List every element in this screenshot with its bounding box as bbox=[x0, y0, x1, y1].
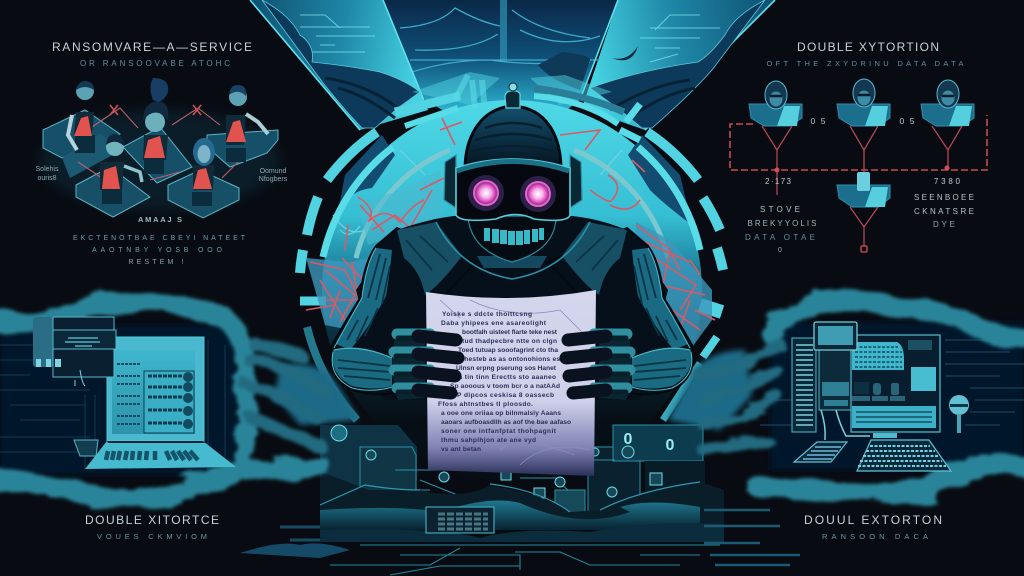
side ear plates bbox=[444, 155, 582, 208]
connector label: 05 bbox=[810, 116, 826, 126]
collar line bbox=[436, 222, 590, 279]
server rack bbox=[792, 338, 816, 432]
tower bbox=[819, 350, 851, 410]
laptop screen bbox=[107, 337, 204, 441]
red dashed bracket bbox=[730, 115, 987, 170]
top knob bbox=[505, 83, 520, 108]
inner arc segments bbox=[323, 75, 700, 257]
left tangle fill bbox=[306, 258, 372, 330]
right stack text: SEENBOEE bbox=[914, 193, 974, 202]
left stack text: DATA OTAE bbox=[745, 233, 815, 242]
note text: bootfalh uisteet flarte teke nest bbox=[462, 329, 558, 336]
note text: aaoars aufboasdllh as aof the bae aafaso bbox=[441, 419, 571, 426]
isometric platform network bbox=[40, 105, 280, 218]
figure 3 bbox=[226, 85, 268, 162]
mouse lamp bbox=[949, 395, 969, 433]
note text: vs ant betan bbox=[441, 446, 481, 453]
subheading: OFT THE ZXYDRINU DATA DATA bbox=[766, 59, 964, 68]
panel digit: 0 bbox=[624, 431, 633, 448]
panel: right desktop scene bbox=[704, 300, 1024, 493]
hacker hands bbox=[392, 332, 632, 400]
body text bbox=[73, 235, 246, 266]
panel: left laptop scene bbox=[0, 302, 325, 497]
left stack text: STOVE bbox=[760, 205, 800, 214]
rock patches between arcs bbox=[333, 72, 692, 234]
left stack text: BREKYYOLIS bbox=[748, 219, 816, 228]
bottom hills and traces bbox=[240, 472, 800, 575]
neck plate bbox=[477, 256, 547, 268]
body arc bbox=[574, 150, 668, 258]
popup window bbox=[33, 317, 116, 386]
dome shading bbox=[470, 123, 556, 152]
right eye bbox=[520, 176, 556, 212]
smoke frame bbox=[704, 300, 1024, 493]
left tangle fill upper bbox=[358, 170, 442, 245]
jaw bbox=[468, 216, 556, 262]
caption: bottom left: DOUBLE XITORTCE bbox=[85, 513, 219, 527]
right tangle fill bbox=[636, 222, 712, 350]
robot hacker figure bbox=[331, 83, 693, 400]
teeth bbox=[484, 228, 544, 245]
node 2 bbox=[837, 79, 890, 172]
main monitor bbox=[851, 335, 940, 438]
small monitor bbox=[814, 322, 857, 350]
caption: bottom right: RANSOON DACA bbox=[822, 532, 928, 541]
circuit panels bbox=[320, 425, 705, 520]
body arc bbox=[356, 150, 450, 258]
figure 1 bbox=[68, 81, 95, 153]
value: 2·173 bbox=[765, 177, 792, 186]
note text: soner one intfanfptat thohpagnit bbox=[441, 428, 557, 435]
top V panorama bbox=[250, 0, 775, 150]
side label right 2: Nfogbers bbox=[259, 176, 288, 183]
note text: Yoiske s ddcte thoittcsng bbox=[442, 311, 532, 318]
note text: S P dipcos ceskisa 8 oassecb bbox=[450, 392, 554, 399]
small label: AMAAJ S bbox=[138, 215, 182, 224]
right stack text: CKNATSRE bbox=[914, 207, 974, 216]
bottom circuit city bbox=[320, 425, 705, 520]
left stack text: 0 bbox=[778, 247, 782, 254]
side label left 2: ouris8 bbox=[37, 175, 57, 182]
disc fill bbox=[322, 100, 702, 480]
note text: Thesteb as as ontonohions es bbox=[460, 356, 560, 363]
caption: bottom right bbox=[804, 513, 942, 541]
right stack text bbox=[914, 193, 974, 229]
outer arc segments bbox=[300, 96, 723, 420]
laptop keyboard bbox=[85, 441, 236, 469]
note text: Daba yhipees ene asareolight bbox=[441, 320, 547, 327]
note text: ta tin tinn Erectts sto aaaneo bbox=[456, 374, 556, 381]
note text: a ooe one oriiaa op bilnmalsly Aaans bbox=[441, 410, 561, 417]
note text: Ffoss ahtnstbes tl ploosdo. bbox=[438, 401, 533, 408]
smoke frame bbox=[0, 302, 325, 497]
figure 5 bbox=[192, 138, 215, 206]
heading: RANSOMVARE—A—SERVICE bbox=[52, 40, 252, 54]
note text: tud thadpecbre ntte on clgn bbox=[462, 338, 557, 345]
connector label: 05 bbox=[900, 116, 915, 126]
note text: Toed tutuap sooofagrint cto tha bbox=[458, 347, 558, 354]
body text: RESTEM ! bbox=[128, 259, 184, 266]
figure 4 bbox=[100, 134, 142, 204]
cup icon bbox=[74, 440, 98, 456]
caption: bottom left bbox=[85, 513, 219, 541]
panel digit: 0 bbox=[666, 437, 675, 454]
ransom note paper bbox=[426, 290, 596, 476]
left eye bbox=[468, 175, 504, 211]
body text: EKCTENOTBAE CBEYI NATEET bbox=[73, 235, 246, 242]
side label right: Oomund bbox=[260, 168, 287, 175]
right stack text: DYE bbox=[933, 220, 955, 229]
caption: bottom left: VOUES CKMVIOM bbox=[97, 532, 207, 541]
value: 7380 bbox=[934, 177, 961, 186]
torso bbox=[356, 215, 668, 400]
node 1 bbox=[749, 81, 802, 195]
circular cyber ring bbox=[300, 72, 723, 480]
side label left: Solehis bbox=[36, 166, 59, 173]
note text bbox=[438, 311, 571, 453]
note text: thmu sahplhjon ate ane vyd bbox=[441, 437, 536, 444]
lower node bbox=[837, 172, 890, 252]
rock mass beside ring bbox=[275, 350, 752, 430]
data terminal bbox=[426, 507, 494, 533]
note text: Ulnsn erpng pserung sos Hanet bbox=[456, 365, 557, 372]
figure 2 bbox=[143, 78, 168, 174]
panel: ransomware-as-a-service bbox=[36, 40, 288, 266]
note text: Sp aooous v toom bcr o a natAAd bbox=[450, 383, 560, 390]
caption: bottom right: DOUUL EXTORTON bbox=[804, 513, 942, 527]
head dome bbox=[465, 106, 561, 170]
main keyboard bbox=[857, 440, 951, 471]
left stack text bbox=[745, 205, 816, 254]
red data veins bbox=[306, 118, 715, 350]
node 3 bbox=[921, 80, 974, 170]
heading: DOUBLE XYTORTION bbox=[797, 40, 939, 54]
panel: double extortion top right bbox=[730, 40, 987, 254]
body text: AAOTNBY YOSB OOO bbox=[92, 247, 223, 254]
arms bbox=[331, 222, 693, 394]
subheading: OR RANSOOVABE ATOHC bbox=[80, 59, 230, 68]
left pad bbox=[794, 410, 870, 462]
visor bbox=[456, 159, 570, 220]
